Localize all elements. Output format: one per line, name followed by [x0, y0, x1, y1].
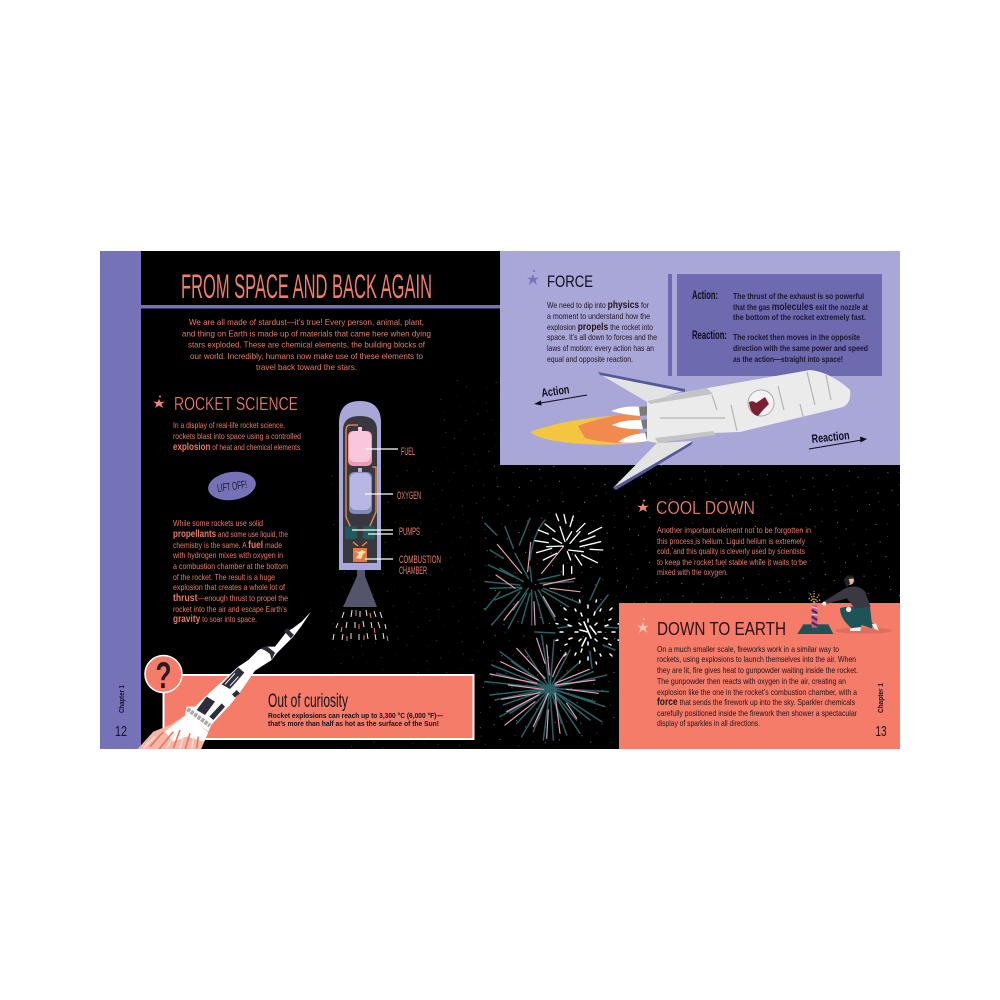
reaction: direction with the same power and speed: [733, 344, 868, 353]
page marker right: chapter and number: Chapter 1: [876, 683, 885, 713]
text: fuel explanation: chemistry is the same. A fuel made: [173, 540, 282, 551]
firework base: [797, 624, 833, 634]
reaction: as the action—straight into space!: [733, 355, 843, 364]
intro text: We are all made of stardust—it’s true! Every person, animal, plant,: [189, 318, 424, 327]
heading: ROCKET SCIENCE: [174, 394, 298, 414]
arrow: reaction: Reaction: [811, 428, 850, 446]
force paragraph: We need to dip into physics for: [547, 300, 649, 311]
fins: [598, 372, 693, 490]
combustion chamber: [353, 548, 367, 562]
engine band: [187, 709, 210, 726]
force paragraph: space. It’s all down to forces and the: [547, 333, 657, 342]
rocket markings: [197, 628, 294, 720]
rocket stripes: [225, 673, 238, 686]
diagram labels: OXYGEN: [397, 490, 421, 502]
heading: DOWN TO EARTH: [657, 619, 786, 639]
rocket science text: rockets blast into space using a controlled: [173, 432, 301, 441]
force paragraph: [547, 300, 657, 364]
intro text: [182, 318, 431, 372]
paragraph: explosion like the one in the rocket’s combustion chamber, with a: [657, 688, 857, 697]
action: that the gas molecules exit the nozzle at: [733, 301, 868, 313]
force paragraph: equal and opposite reaction.: [547, 355, 633, 364]
force paragraph: laws of motion: every action has an: [547, 344, 654, 353]
icon: question mark: [145, 655, 182, 696]
text: fuel explanation: While some rockets use solid: [173, 519, 263, 528]
ground shadow: [835, 628, 892, 634]
exhaust flame: [530, 406, 648, 445]
arrow: action: [534, 382, 587, 406]
text: fuel explanation: with hydrogen mixes with oxygen in: [172, 551, 283, 560]
page marker right: chapter and number: [876, 683, 886, 740]
section: rocket science: [153, 394, 302, 453]
fuel tank: [348, 427, 372, 466]
icon: question mark: ?: [156, 655, 172, 696]
page marker right: chapter and number: 13: [876, 723, 886, 740]
panel: left page side bar: [100, 251, 141, 749]
flames: [137, 714, 208, 750]
panel: black book spread background: [100, 251, 900, 749]
label lines: [352, 449, 398, 559]
heading: COOL DOWN: [656, 498, 755, 518]
diagram labels: FUEL: [401, 446, 415, 458]
callout: out of curiosity: [164, 675, 474, 739]
paragraph: Another important element not to be forgotten in: [657, 526, 811, 535]
paragraph: carefully positioned inside the firework then shower a spectacular: [657, 709, 857, 718]
intro text: stars exploded. These are chemical elements, the building blocks of: [188, 340, 426, 350]
firework: white burst: [535, 514, 603, 575]
action: the bottom of the rocket extremely fast.: [733, 313, 866, 322]
text: fuel explanation: thrust—enough thrust to propel the: [173, 593, 288, 604]
intro text: travel back toward the stars.: [256, 363, 357, 372]
text: fuel explanation: rocket into the air and escape Earth’s: [173, 605, 287, 614]
window: [748, 390, 774, 416]
nozzle: [343, 570, 377, 607]
page marker left: chapter and number: Chapter 1: [117, 685, 126, 713]
illustration: fireworks: [485, 514, 620, 740]
paragraph: cold, and this quality is cleverly used by scientists: [657, 547, 805, 556]
section: force text: [527, 270, 657, 364]
icon: star: [153, 396, 165, 408]
text: fuel explanation: gravity to soar into space.: [173, 614, 257, 625]
page marker left: chapter and number: 12: [115, 723, 127, 740]
action: [692, 288, 868, 322]
outer hull: [339, 401, 381, 570]
illustration: launching rocket: [137, 612, 311, 750]
section: down to earth: [637, 618, 858, 728]
paragraph: rockets, using explosions to launch themselves into the air. When: [657, 655, 856, 664]
text: fuel explanation: a combustion chamber at the bottom: [173, 562, 288, 571]
text: fuel explanation: propellants and some use liquid, the: [173, 529, 288, 540]
firework: teal and pink burst: [485, 518, 580, 628]
icon: star: [637, 618, 649, 633]
callout: out of curiosity: that’s more than half as hot as the surface of the Sun!: [268, 719, 439, 728]
pipes: [346, 425, 376, 546]
action: The thrust of the exhaust is so powerful: [733, 292, 864, 301]
badge: lift off: [206, 469, 258, 503]
reaction: [692, 328, 868, 364]
callout: out of curiosity: Rocket explosions can reach up to 3,300 °C (6,000 °F)—: [268, 711, 443, 720]
hull: [647, 370, 850, 443]
panel: action and reaction: [668, 274, 882, 376]
rocket body: [185, 612, 311, 732]
paragraph: mixed with the oxygen.: [657, 568, 728, 577]
diagram labels: CHAMBER: [399, 565, 427, 577]
paragraph: force that sends the firework up into the sky. Sparkler chemicals: [657, 697, 855, 708]
section: cool down: [637, 498, 811, 577]
intro text: and thing on Earth is made up of materials that came here when dying: [182, 330, 431, 338]
firework tube and sparks: [809, 591, 821, 628]
action: Action:: [692, 288, 718, 302]
illustration: large rocket: [530, 370, 850, 490]
paragraph: they are lit, fire gives heat to gunpowder waiting inside the rocket.: [657, 666, 858, 675]
callout: out of curiosity: Out of curiosity: [268, 691, 348, 712]
paragraph: this process is helium. Liquid helium is extremely: [657, 537, 806, 546]
force paragraph: a moment to understand how the: [547, 312, 650, 321]
paragraph: [657, 526, 811, 577]
title block: FROM SPACE AND BACK AGAIN: [181, 268, 432, 306]
text: fuel explanation: of the rocket. The result is a huge: [173, 573, 275, 582]
paragraph: to keep the rocket fuel stable while it waits to be: [657, 558, 807, 567]
rocket science text: [173, 421, 302, 453]
diagram labels: PUMPS: [399, 526, 420, 538]
diagram: rocket cross-section: [333, 401, 441, 641]
diagram labels: [397, 446, 441, 577]
person hands and shoes: [822, 602, 879, 631]
firework: speckled burst: [535, 578, 620, 668]
reaction: Reaction:: [692, 328, 727, 342]
person torso and arm: [823, 586, 871, 608]
rocket science text: explosion of heat and chemical elements.: [173, 442, 302, 453]
reaction: The rocket then moves in the opposite: [733, 333, 860, 342]
paragraph: The gunpowder then reacts with oxygen in the air, creating an: [657, 677, 846, 686]
pumps: [345, 526, 375, 539]
intro text: our world. Incredibly, humans now make use of these elements to: [190, 352, 423, 361]
person legs: [840, 606, 873, 628]
panel: down to earth: [619, 603, 900, 749]
paragraph: [657, 645, 858, 728]
inner chamber: [343, 416, 377, 563]
illustration: person lighting a firework: [797, 575, 892, 634]
paragraph: display of sparkles in all directions.: [657, 719, 760, 728]
diagram labels: COMBUSTION: [399, 554, 441, 566]
text: fuel explanation: explosion that creates a whole lot of: [173, 583, 286, 592]
icon: star: [637, 500, 649, 512]
heading: FORCE: [547, 273, 593, 291]
icon: star: [527, 270, 539, 285]
arrow: action: Action: [540, 382, 570, 400]
nozzles: [639, 406, 653, 441]
text: fuel explanation: [172, 519, 288, 625]
person head: [845, 575, 854, 587]
panel: force: [500, 251, 900, 465]
starfield: [330, 380, 900, 749]
exhaust sparks: [333, 610, 386, 640]
page marker left: chapter and number: [115, 685, 127, 740]
paragraph: On a much smaller scale, fireworks work in a similar way to: [657, 645, 839, 654]
title block: [141, 268, 500, 308]
firework: large lower burst: [485, 635, 608, 740]
force paragraph: explosion propels the rocket into: [547, 322, 653, 333]
rocket science text: In a display of real-life rocket science,: [173, 421, 285, 430]
oxygen tank: [349, 468, 372, 514]
badge: lift off: LIFT OFF!: [216, 479, 248, 495]
